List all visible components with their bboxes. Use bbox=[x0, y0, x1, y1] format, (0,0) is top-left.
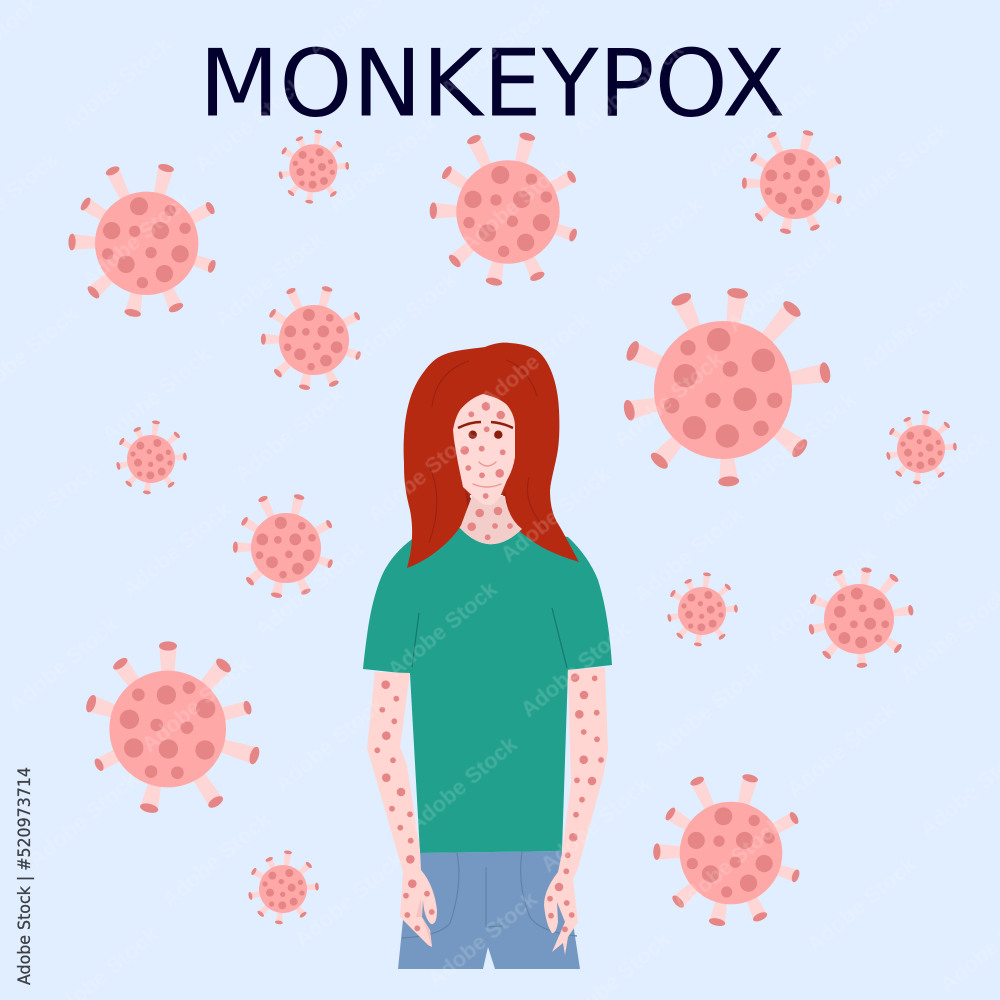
watermark: Adobe Stock bbox=[97, 341, 216, 447]
icon: virus top left bbox=[68, 162, 217, 318]
neck with spots bbox=[460, 496, 522, 544]
watermark: Adobe Stock bbox=[722, 231, 841, 337]
icon: virus centre left bbox=[233, 493, 334, 599]
watermark: Adobe Stock bbox=[157, 806, 276, 912]
watermark: Adobe Stock bbox=[855, 271, 974, 377]
watermark: Adobe Stock bbox=[117, 496, 236, 602]
watermark: Adobe Stock bbox=[802, 851, 921, 957]
watermark: Adobe Stock bbox=[57, 31, 176, 137]
icon: virus upper left centre bbox=[261, 285, 362, 391]
watermark: Adobe Stock bbox=[403, 731, 522, 837]
watermark: Adobe Stock bbox=[762, 541, 881, 647]
watermark: Adobe Stock bbox=[270, 691, 389, 797]
watermark: Adobe Stock bbox=[589, 191, 708, 297]
icon: small virus bottom left bbox=[248, 850, 319, 925]
t-shirt bbox=[363, 528, 612, 853]
icon: virus lower right bbox=[808, 567, 914, 668]
jeans bbox=[398, 851, 580, 969]
watermark: Adobe Stock bbox=[343, 266, 462, 372]
watermark: Adobe Stock bbox=[569, 36, 688, 142]
watermark: Adobe Stock bbox=[629, 501, 748, 607]
watermark: Adobe Stock bbox=[77, 186, 196, 292]
icon: large virus right bbox=[622, 287, 832, 487]
watermark: Adobe Stock bbox=[516, 616, 635, 722]
watermark: Adobe Stock bbox=[782, 696, 901, 802]
watermark: Adobe Stock bbox=[290, 846, 409, 952]
face bbox=[453, 394, 515, 505]
watermark: Adobe Stock bbox=[609, 346, 728, 452]
figure: woman with rash bbox=[363, 343, 612, 969]
left arm with spots bbox=[367, 672, 437, 947]
hair bbox=[404, 343, 579, 568]
watermark: Adobe Stock bbox=[702, 76, 821, 182]
right arm with spots bbox=[544, 667, 608, 955]
title: MONKEYPOX bbox=[199, 30, 786, 138]
watermark: Adobe Stock bbox=[323, 111, 442, 217]
watermark: Adobe Stock bbox=[496, 461, 615, 567]
icon: small virus right of figure bbox=[667, 572, 738, 647]
watermark: Adobe Stock bbox=[383, 576, 502, 682]
watermark: Adobe Stock bbox=[742, 386, 861, 492]
watermark: Adobe Stock bbox=[190, 71, 309, 177]
icon: virus top right bbox=[742, 129, 843, 235]
watermark: Adobe Stock bbox=[363, 421, 482, 527]
watermark: Adobe Stock bbox=[456, 151, 575, 257]
icon: small virus left bbox=[116, 420, 187, 495]
watermark: Adobe Stock bbox=[137, 651, 256, 757]
icon: large virus lower left bbox=[84, 641, 261, 815]
watermark: Adobe Stock bbox=[875, 426, 994, 532]
watermark: Adobe Stock bbox=[24, 766, 143, 872]
watermark: Adobe Stock bbox=[423, 886, 542, 992]
watermark: Adobe Stock bbox=[4, 611, 123, 717]
watermark: Adobe Stock bbox=[250, 536, 369, 642]
watermark: Adobe Stock bbox=[669, 811, 788, 917]
icon: virus top centre bbox=[429, 131, 578, 287]
watermark: Adobe Stock bbox=[210, 226, 329, 332]
watermark: Adobe Stock bbox=[835, 116, 954, 222]
icon: virus small top bbox=[278, 129, 349, 204]
watermark: Adobe Stock bbox=[230, 381, 349, 487]
watermark: Adobe Stock bbox=[649, 656, 768, 762]
icon: virus bottom right bbox=[653, 773, 801, 927]
stock id stamp: Adobe Stock | #520973714 bbox=[15, 767, 34, 985]
watermark: Adobe Stock bbox=[536, 771, 655, 877]
watermark: Adobe Stock bbox=[476, 306, 595, 412]
icon: small virus far right bbox=[886, 410, 957, 485]
